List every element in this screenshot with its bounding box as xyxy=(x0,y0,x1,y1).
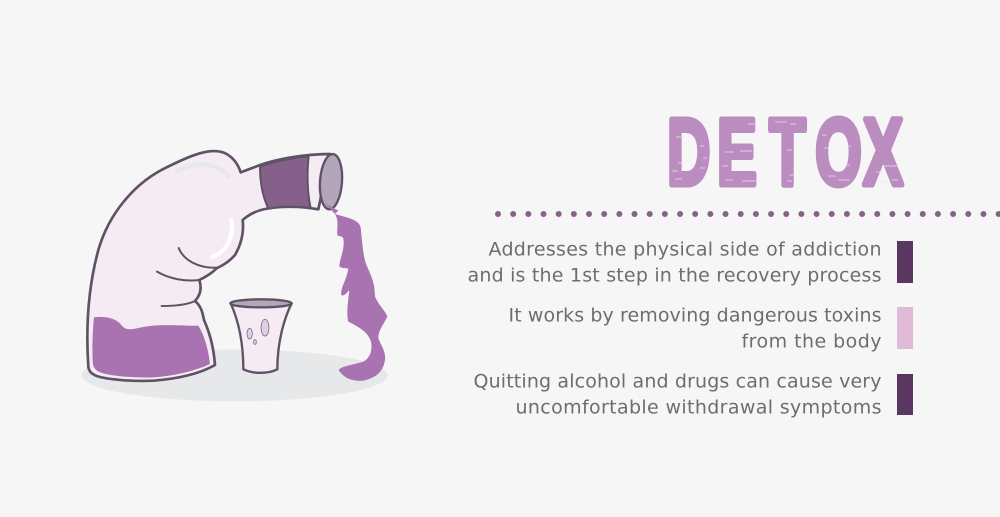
point 2 text: from the body xyxy=(742,330,882,352)
bottle mouth xyxy=(318,153,344,214)
point 1: physical side of addiction xyxy=(468,238,913,286)
bottle fold lines xyxy=(157,248,217,306)
bottle body xyxy=(87,151,330,381)
bottle top highlight xyxy=(177,164,228,176)
point 1 bar xyxy=(897,241,913,283)
glass xyxy=(230,299,292,373)
liquid stream xyxy=(325,203,387,381)
point 3: withdrawal symptoms xyxy=(474,370,913,418)
point 3 text: Quitting alcohol and drugs can cause very xyxy=(474,370,882,392)
point 3 text: uncomfortable withdrawal symptoms xyxy=(516,396,882,418)
glass rim xyxy=(230,299,292,307)
point 3 bar xyxy=(897,374,913,415)
illustration: bottle pouring into glass xyxy=(82,151,388,401)
title texture xyxy=(672,122,898,182)
bottle side highlight xyxy=(212,220,232,257)
point 1 text: Addresses the physical side of addiction xyxy=(488,238,882,260)
floor shadow xyxy=(82,349,388,401)
bottle neck label xyxy=(260,156,311,209)
point 1 text xyxy=(468,238,882,286)
title: DETOX: DETOX xyxy=(667,98,903,205)
dotted divider xyxy=(498,211,1000,217)
point 2 text xyxy=(508,304,882,352)
point 2 text: It works by removing dangerous toxins xyxy=(508,304,882,326)
point 2 bar xyxy=(897,307,913,349)
point 1 text: and is the 1st step in the recovery process xyxy=(468,264,882,286)
point 2: removing toxins xyxy=(508,304,913,352)
point 3 text xyxy=(474,370,882,418)
bottle liquid xyxy=(92,317,210,377)
glass body xyxy=(231,303,292,373)
glass bubbles xyxy=(247,319,269,344)
